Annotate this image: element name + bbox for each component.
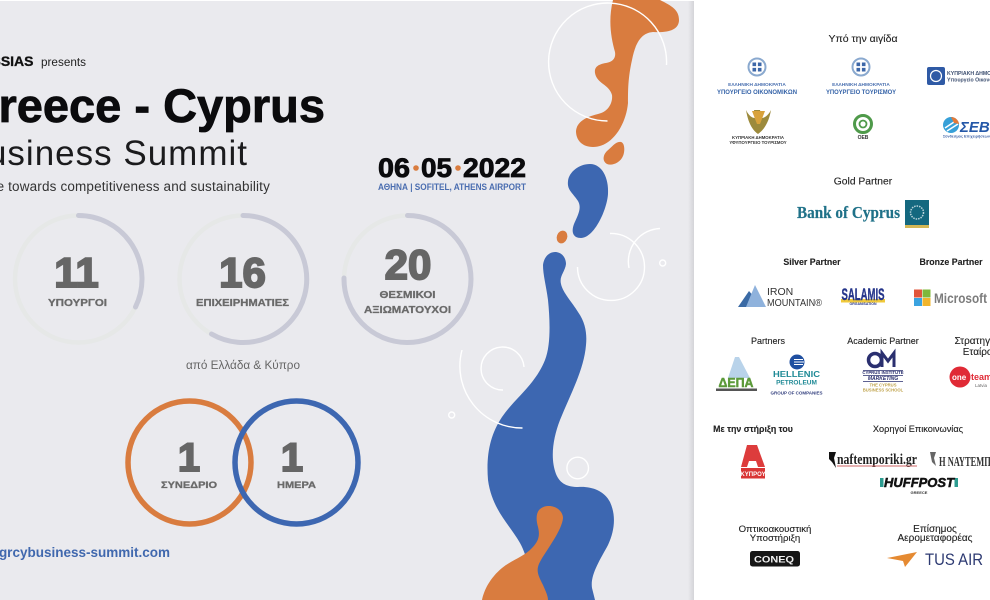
logo: Hellenic Petroleum: GROUP OF COMPANIES	[770, 390, 823, 396]
heading: with the support of: Με την στήριξη του	[713, 424, 793, 434]
event date and venue: 05	[421, 153, 452, 183]
logo: Ministry of Tourism: ΥΠΟΥΡΓΕΙΟ ΤΟΥΡΙΣΜΟΥ	[826, 89, 897, 96]
logo: Cyprus Deputy Ministry of Tourism	[729, 110, 787, 145]
stat: 16 entrepreneurs: ΕΠΙΧΕΙΡΗΜΑΤΙΕΣ	[196, 297, 289, 309]
heading: communication sponsors: Χορηγοί Επικοινωνίας	[873, 424, 964, 434]
heading: partners: Partners	[751, 336, 786, 346]
heading: audiovisual support: Υποστήριξη	[750, 533, 800, 544]
event date and venue: 06	[378, 153, 410, 183]
presenter line: presents	[41, 55, 86, 69]
panel: event background	[0, 1, 694, 600]
heading: official air carrier: Επίσημος	[913, 523, 957, 535]
stat: 11 ministers	[15, 216, 142, 342]
logo: Microsoft	[914, 290, 987, 306]
stat: 11 ministers: 11	[54, 249, 99, 296]
logo: oneteam: one	[952, 373, 967, 382]
logo: SEB	[943, 117, 990, 138]
logo: ConEq	[750, 551, 800, 566]
presenter line	[0, 53, 86, 69]
logo: Salamis: SALAMIS	[842, 285, 884, 304]
logo: Cyprus Institute of Marketing: CYPRUS INSTITUTE	[862, 370, 904, 375]
heading: gold partner: Gold Partner	[834, 176, 893, 188]
heading: strategic partner	[954, 335, 990, 358]
stat: 1 day: ΗΜΕΡΑ	[277, 480, 316, 491]
logo: Alpha Cyprus: ΚΥΠΡΟΥ	[740, 472, 766, 478]
logo: SEB: Σύνδεσμος Επιχειρήσεων	[943, 134, 990, 138]
logo: DEPA: ΔΕΠΑ	[718, 376, 754, 390]
stat: 1 conference: ΣΥΝΕΔΡΙΟ	[161, 480, 217, 491]
caption: from Greece and Cyprus: από Ελλάδα & Κύπρο	[186, 360, 300, 372]
stat: 20 officials: ΘΕΣΜΙΚΟΙ	[380, 289, 436, 301]
logo: DEPA	[716, 357, 757, 391]
logo: Cyprus Institute of Marketing	[862, 353, 904, 392]
logo: HuffPost Greece: HUFFPOST	[884, 476, 955, 490]
heading: audiovisual support	[739, 524, 811, 544]
logo: Salamis	[841, 285, 885, 306]
logo: SEB: ΣΕΒ	[959, 119, 990, 136]
logo: Hellenic Petroleum	[770, 354, 823, 396]
logo: Cyprus Ministry of Finance	[927, 67, 990, 85]
event date and venue	[378, 153, 526, 192]
logo: HuffPost Greece: GREECE	[911, 490, 928, 495]
logo: Bank of Cyprus	[797, 200, 929, 228]
logo: Ministry of Tourism: ΕΛΛΗΝΙΚΗ ΔΗΜΟΚΡΑΤΙΑ	[832, 82, 890, 88]
logo: Hellenic Petroleum: PETROLEUM	[776, 380, 817, 386]
logo: Iron Mountain	[738, 285, 822, 309]
stat: 11 ministers: ΥΠΟΥΡΓΟΙ	[48, 297, 107, 309]
stat: 1 day: 1	[281, 436, 303, 480]
stat: 1 conference: 1	[178, 436, 200, 480]
decorative white arcs	[449, 3, 667, 479]
logo: oneteam	[950, 366, 990, 388]
logo: Tus Air	[887, 550, 983, 569]
logo: OEB	[854, 116, 872, 141]
logo: Tus Air: TUS AIR	[925, 550, 983, 569]
event date and venue: 2022	[463, 153, 526, 183]
logo: naftemporiki.gr: naftemporiki.gr	[837, 452, 917, 468]
logo: Cyprus Institute of Marketing: THE CYPRUS	[870, 382, 897, 388]
decorative blobs	[482, 0, 679, 600]
logo: Cyprus Institute of Marketing: MARKETING	[868, 376, 898, 382]
logo: ConEq: CONEQ	[754, 554, 794, 566]
logo: Iron Mountain: IRON	[767, 286, 793, 298]
stat: 1 conference	[128, 401, 251, 524]
logo: Ministry of Tourism	[826, 58, 897, 96]
heading: academic partner: Academic Partner	[847, 336, 919, 346]
logo: Cyprus Deputy Ministry of Tourism: ΥΦΥΠΟΥΡΓΕΙΟ ΤΟΥΡΙΣΜΟΥ	[729, 140, 787, 145]
heading: official air carrier: Αερομεταφορέας	[898, 532, 973, 544]
heading: under the auspices: Υπό την αιγίδα	[828, 33, 898, 45]
event date and venue: ΑΘΗΝΑ | SOFITEL, ATHENS AIRPORT	[378, 182, 526, 192]
logo: OEB: ΟΕΒ	[858, 135, 869, 141]
logo: Hellenic Petroleum: HELLENIC	[773, 369, 820, 379]
stat: 16 entrepreneurs: 16	[219, 249, 266, 296]
stat: 1 day	[235, 401, 358, 524]
stat: 20 officials: 20	[385, 241, 431, 288]
heading: audiovisual support: Οπτικοακουστική	[739, 524, 811, 535]
logo: Bank of Cyprus: Bank of Cyprus	[797, 203, 901, 222]
logo: Salamis: ORGANISATION	[850, 302, 877, 306]
heading: silver partner: Silver Partner	[783, 257, 841, 267]
logo: Alpha Cyprus	[740, 445, 766, 478]
logo: Cyprus Institute of Marketing: BUSINESS SCHOOL	[863, 388, 904, 392]
logo: Ministry of Finance: ΕΛΛΗΝΙΚΗ ΔΗΜΟΚΡΑΤΙΑ	[728, 82, 786, 88]
heading: official air carrier	[898, 523, 973, 544]
logo: HuffPost Greece	[880, 476, 958, 495]
panel: sponsors	[694, 0, 990, 600]
logo: Iron Mountain: MOUNTAIN®	[767, 297, 822, 309]
stat: 20 officials: ΑΞΙΩΜΑΤΟΥΧΟΙ	[364, 304, 451, 316]
logo: Ministry of Finance: ΥΠΟΥΡΓΕΙΟ ΟΙΚΟΝΟΜΙΚΩΝ	[717, 89, 797, 96]
logo: Ministry of Finance	[717, 58, 797, 96]
stat: 20 officials	[344, 216, 471, 343]
stat: 16 entrepreneurs	[180, 215, 307, 342]
logo: oneteam: Latvia	[975, 383, 988, 388]
heading: bronze partner: Bronze Partner	[919, 257, 983, 267]
logo: Cyprus Deputy Ministry of Tourism: ΚΥΠΡΙΑΚΗ ΔΗΜΟΚΡΑΤΙΑ	[732, 135, 784, 140]
